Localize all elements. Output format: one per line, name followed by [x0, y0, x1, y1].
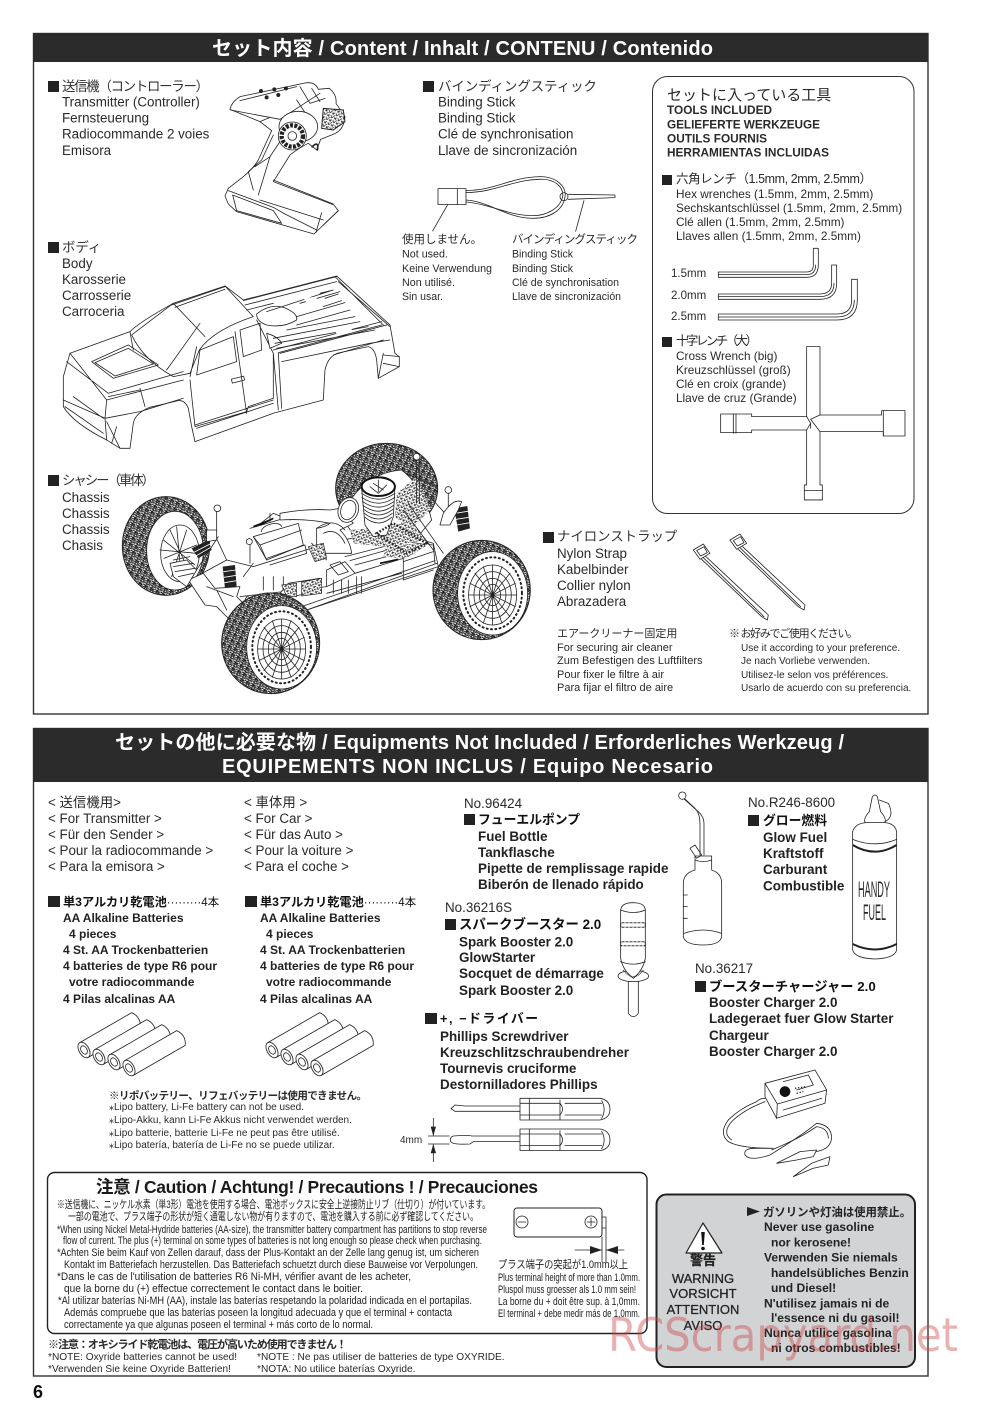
text block: warning labels: [667, 1253, 739, 1333]
text block: spark booster: No.36216S: [445, 900, 512, 915]
text block: transmitter: Transmitter (Controller): [62, 94, 200, 110]
panel: tools included: [652, 76, 914, 514]
panel: caution: [48, 1172, 647, 1334]
icon: hex wrench set: 1.5mm: [671, 268, 706, 280]
text block: body: Karosserie: [62, 272, 126, 287]
text block: warning message: l'essence ni du gasoil!: [771, 1311, 900, 1325]
text block: cross wrench: Clé en croix (grande): [676, 377, 786, 391]
text block: for transmitter: < For Transmitter >: [48, 811, 162, 826]
text block: glow fuel: No.R246-8600: [748, 795, 835, 810]
text block: for car: [244, 795, 354, 874]
text block: hex wrenches: Clé allen (1.5mm, 2mm, 2.5mm): [676, 215, 845, 229]
text block: booster charger: ブースターチャージャー 2.0: [709, 978, 876, 994]
text block: not used label: [402, 232, 492, 303]
icon: screwdrivers: [428, 1098, 610, 1162]
text block: AA batteries transmitter: 4 pieces: [69, 927, 117, 941]
wheel: front: [222, 593, 320, 694]
heading bar: equipment not included: セットの他に必要な物 / Equipments Not Included / Erforderliches Werkzeug /: [115, 731, 844, 754]
text block: screwdriver: Kreuzschlitzschraubendreher: [440, 1045, 630, 1060]
icon: hex wrench set: [671, 248, 857, 323]
heading: caution: 注意 / Caution / Achtung! / Precautions ! / Precauciones: [96, 1177, 538, 1197]
icon: booster charger: [723, 1070, 832, 1177]
icon: warning triangle: [686, 1223, 722, 1253]
text block: terminal note: La borne du + doit être sup. à 1,0mm.: [498, 1296, 640, 1308]
text block: lipo warning: ⁎Lipo-Akku, kann Li-Fe Akkus nicht verwendet werden.: [109, 1115, 352, 1126]
icon: batteries right: [263, 1011, 376, 1078]
text block: spark booster: GlowStarter: [459, 950, 536, 965]
engine: [350, 477, 430, 553]
text block: booster charger: Booster Charger 2.0: [709, 1044, 837, 1059]
panel: set contents: [33, 33, 928, 714]
text block: warning message: und Diesel!: [771, 1281, 836, 1295]
heading bar: equipment not included: [33, 728, 928, 782]
text block: fuel bottle: Tankflasche: [478, 845, 555, 860]
icon: binding stick: [433, 177, 615, 231]
text block: nylon strap: Collier nylon: [557, 578, 631, 593]
text block: glow fuel: Kraftstoff: [763, 846, 824, 861]
text block: glow fuel: [748, 795, 845, 894]
text block: AA batteries transmitter: 4 batteries de type R6 pour: [63, 959, 217, 973]
text block: nylon strap: Abrazadera: [557, 594, 627, 609]
wheel: rear left: [122, 497, 210, 595]
text block: preference note: ※ お好みでご使用ください。: [729, 626, 858, 640]
text block: AA batteries transmitter: votre radiocommande: [69, 975, 195, 989]
text block: caution body: flow of current. The plus (+) terminal on some types of batteries is not long enough so please check when purchasing.: [63, 1235, 482, 1247]
text block: binding stick: Llave de sincronización: [438, 143, 577, 158]
wheel: right: [433, 540, 530, 640]
text block: caution body: *Achten Sie beim Kauf von Zellen darauf, dass der Plus-Kontakt an der Zelle lang genug ist, um sicheren: [57, 1247, 479, 1259]
text block: hex wrenches: 六角レンチ（1.5mm, 2mm, 2.5mm）: [676, 172, 872, 186]
text block: AA batteries transmitter: [48, 894, 220, 1006]
heading bar: set contents: [33, 33, 928, 62]
text block: terminal note: Pluspol muss groesser als 1.0 mm sein!: [498, 1284, 636, 1296]
text block: AA batteries transmitter: 4 Pilas alcalinas AA: [63, 992, 176, 1006]
text block: air cleaner note: For securing air cleaner: [557, 642, 673, 654]
text block: not used label: 使用しません。: [402, 232, 482, 246]
text block: fuel bottle: Biberón de llenado rápido: [478, 877, 644, 892]
text block: for car: < Für das Auto >: [244, 827, 343, 842]
heading: tools included: TOOLS INCLUDED: [667, 103, 772, 117]
text block: terminal note: Plus terminal height of more than 1.0mm.: [498, 1272, 640, 1284]
text block: binding stick label: [512, 232, 638, 303]
icon: fuel can: FUEL: [863, 900, 886, 925]
text block: warning message: handelsübliches Benzin: [771, 1266, 909, 1280]
watermark: RCScrapyard.net: [608, 1308, 958, 1362]
text block: oxyride note: *NOTE : Ne pas utiliser de batteries de type OXYRIDE.: [257, 1352, 505, 1363]
text block: binding stick label: Binding Stick: [512, 248, 573, 260]
text block: glow fuel: Carburant: [763, 862, 828, 877]
heading bar: set contents: セット内容 / Content / Inhalt / CONTENU / Contenido: [212, 37, 713, 60]
text block: oxyride note: ※注意：オキシライド乾電池は、電圧が高いため使用できません！: [48, 1337, 347, 1351]
text block: booster charger: Booster Charger 2.0: [709, 995, 837, 1010]
text block: lipo warning: ⁎Lipo battery, Li-Fe battery can not be used.: [109, 1102, 304, 1113]
text block: screwdriver: +, −ドライバー: [440, 1011, 538, 1026]
icon: batteries left: [75, 1011, 188, 1078]
text block: spark booster: Spark Booster 2.0: [459, 983, 573, 998]
text block: nylon strap: ナイロンストラップ: [557, 529, 678, 544]
text block: nylon strap: Kabelbinder: [557, 562, 629, 577]
text block: spark booster: [445, 900, 604, 998]
text block: transmitter: 送信機（コントローラー）: [62, 79, 209, 94]
text block: binding stick label: バインディングスティック: [512, 232, 638, 246]
text block: caution body: 一部の電池で、プラス端子の形状が短く通電しない物が有りますので、電池を購入する前に必ず確認してください。: [68, 1209, 478, 1223]
text block: oxyride note: [48, 1337, 505, 1375]
icon: hex wrench set: 2.5mm: [671, 311, 706, 323]
text block: AA batteries car: 4 pieces: [266, 927, 314, 941]
text block: fuel bottle: [464, 796, 669, 892]
text block: warning labels: ATTENTION: [667, 1302, 739, 1317]
text block: body: Carrosserie: [62, 288, 131, 303]
text block: fuel bottle: Fuel Bottle: [478, 829, 548, 844]
text block: for transmitter: [48, 795, 213, 874]
text block: AA batteries car: 4 batteries de type R6 pour: [260, 959, 414, 973]
text block: AA batteries transmitter: AA Alkaline Batteries: [63, 911, 184, 925]
text block: booster charger: No.36217: [695, 961, 753, 976]
page number: 6: [33, 1382, 43, 1402]
text block: lipo warning: [109, 1089, 367, 1151]
text block: not used label: Sin usar.: [402, 291, 443, 303]
text block: caution body: *Al utilizar baterías Ni-MH (AA), instale las baterías respetando la polaridad indicada en el portapilas.: [58, 1295, 472, 1307]
text block: hex wrenches: [662, 172, 902, 243]
text block: cross wrench: Kreuzschlüssel (groß): [676, 363, 791, 377]
text block: binding stick: [423, 78, 597, 158]
text block: hex wrenches: Sechskantschlüssel (1.5mm, 2mm, 2.5mm): [676, 201, 902, 215]
icon: hex wrench set: 2.0mm: [671, 290, 706, 302]
text block: caution body: *When using Nickel Metal-Hydride batteries (AA-size), the transmitter battery compartment has partitions to stop reverse: [57, 1224, 487, 1236]
heading: tools included: GELIEFERTE WERKZEUGE: [667, 118, 820, 132]
text block: warning message: Verwenden Sie niemals: [764, 1250, 898, 1264]
text block: warning message: nor kerosene!: [771, 1236, 851, 1250]
text block: caution body: [57, 1197, 490, 1331]
air cleaner: [280, 495, 362, 562]
text block: preference note: [729, 626, 911, 694]
text block: body: Body: [62, 256, 93, 271]
text block: chassis: [48, 473, 155, 553]
text block: glow fuel: Combustible: [763, 878, 845, 894]
text block: chassis: Chassis: [62, 522, 110, 537]
chassis frame: [190, 530, 438, 610]
text block: glow fuel: グロー燃料: [763, 813, 827, 828]
text block: AA batteries car: 4 St. AA Trockenbatterien: [260, 943, 405, 957]
text block: chassis: Chasis: [62, 538, 103, 553]
text block: binding stick: Clé de synchronisation: [438, 126, 573, 142]
text block: air cleaner note: Para fijar el filtro de aire: [557, 682, 673, 694]
text block: spark booster: スパークブースター 2.0: [459, 916, 601, 932]
text block: warning labels: VORSICHT: [669, 1286, 737, 1301]
icon: nylon straps: [693, 534, 805, 620]
text block: warning labels: AVISO: [684, 1318, 722, 1333]
text block: for car: < Para el coche >: [244, 859, 349, 874]
suspension: [170, 453, 470, 620]
text block: screwdriver: Destornilladores Phillips: [440, 1077, 598, 1092]
arrow: [747, 1207, 760, 1216]
text block: transmitter: Radiocommande 2 voies: [62, 126, 210, 142]
icon: battery terminal diagram: [514, 1208, 624, 1262]
icon: fuel bottle: [679, 792, 722, 945]
text block: binding stick: バインディングスティック: [438, 78, 597, 94]
text block: spark booster: Spark Booster 2.0: [459, 934, 573, 950]
icon: transmitter controller: [225, 83, 345, 234]
text block: hex wrenches: Llaves allen (1.5mm, 2mm, 2.5mm): [676, 229, 861, 243]
text block: booster charger: Ladegeraet fuer Glow Starter: [709, 1011, 894, 1026]
icon: fuel can: [853, 795, 897, 959]
text block: for transmitter: < 送信機用>: [48, 795, 121, 810]
text block: for car: < For Car >: [244, 811, 313, 826]
text block: for transmitter: < Für den Sender >: [48, 827, 164, 842]
text block: chassis: シャシー（車体）: [62, 473, 155, 488]
text block: AA batteries car: 4 Pilas alcalinas AA: [260, 992, 373, 1006]
text block: warning message: Nunca utilice gasolina: [764, 1326, 892, 1340]
text block: glow fuel: Glow Fuel: [763, 830, 827, 845]
text block: chassis: Chassis: [62, 506, 110, 521]
text block: oxyride note: *NOTE: Oxyride batteries cannot be used!: [48, 1352, 237, 1363]
text block: warning labels: 警告: [690, 1253, 716, 1268]
text block: caution body: Kontakt im Batteriefach herzustellen. Das Batteriefach schuetzt durch diese Bauweise vor Verpolungen.: [64, 1259, 478, 1271]
text block: caution body: *Dans le cas de l'utilisation de batteries R6 Ni-MH, vérifier avant de les acheter,: [57, 1271, 411, 1283]
text block: preference note: Usarlo de acuerdo con su preferencia.: [741, 683, 911, 694]
icon: cross wrench: [721, 347, 905, 500]
text block: cross wrench: Cross Wrench (big): [676, 349, 777, 363]
text block: not used label: Keine Verwendung: [402, 263, 492, 275]
text block: caution body: ※送信機に、ニッケル水素（単3形）電池を使用する場合、電池ボックスに安全上逆接防止リブ（仕切り）が付いています。: [57, 1197, 490, 1211]
text block: air cleaner note: エアークリーナー固定用: [557, 627, 677, 640]
text block: AA batteries car: votre radiocommande: [266, 975, 392, 989]
text block: for car: < Pour la voiture >: [244, 843, 354, 858]
text block: screwdriver: [425, 1011, 630, 1092]
label: 4mm: 4mm: [400, 1135, 422, 1146]
text block: caution body: Además compruebe que las baterías poseen la longitud adecuada y que el terminal + contacta: [64, 1307, 453, 1319]
text block: warning labels: WARNING: [672, 1271, 734, 1286]
text block: cross wrench: Llave de cruz (Grande): [676, 391, 797, 405]
text block: terminal note: プラス端子の突起が1.0mm以上: [498, 1257, 628, 1271]
text block: warning message: ni otros combustibles!: [771, 1341, 901, 1355]
text block: transmitter: Emisora: [62, 143, 112, 158]
text block: preference note: Utilisez-le selon vos préférences.: [741, 670, 888, 681]
text block: lipo warning: ⁎Lipo batería, batería de Li-Fe no se puede utilizar.: [109, 1140, 335, 1151]
text block: binding stick label: Clé de synchronisation: [512, 277, 619, 289]
heading: tools included: HERRAMIENTAS INCLUIDAS: [667, 146, 829, 160]
text block: air cleaner note: Pour fixer le filtre à air: [557, 669, 664, 681]
text block: cross wrench: [662, 334, 797, 405]
text block: for transmitter: < Para la emisora >: [48, 859, 165, 874]
text block: screwdriver: Tournevis cruciforme: [440, 1061, 577, 1076]
text block: hex wrenches: Hex wrenches (1.5mm, 2mm, 2.5mm): [676, 187, 873, 201]
icon: spark booster: [618, 903, 649, 1017]
text block: binding stick: Binding Stick: [438, 94, 516, 110]
text block: caution body: correctamente ya que algunas poseen el terminal + más corto de lo normal.: [64, 1319, 373, 1331]
text block: oxyride note: *NOTA: No utilice baterías Oxyride.: [257, 1364, 416, 1375]
text block: oxyride note: *Verwenden Sie keine Oxyride Batterien!: [48, 1364, 231, 1375]
text block: body: [48, 239, 131, 319]
text block: body: Carroceria: [62, 304, 125, 319]
panel: equipment not included: [33, 728, 928, 1376]
radio box: [250, 513, 307, 565]
text block: AA batteries car: 単3アルカリ乾電池·········4本: [260, 894, 417, 909]
text block: spark booster: Socquet de démarrage: [459, 966, 604, 981]
text block: nylon strap: [543, 529, 678, 609]
text block: chassis: Chassis: [62, 490, 110, 505]
icon: truck body: [63, 276, 399, 448]
text block: preference note: Je nach Vorliebe verwenden.: [741, 656, 870, 667]
text block: screwdriver: Phillips Screwdriver: [440, 1029, 569, 1044]
text block: not used label: Not used.: [402, 248, 448, 260]
text block: booster charger: [695, 961, 894, 1059]
text block: AA batteries transmitter: 4 St. AA Trockenbatterien: [63, 943, 208, 957]
text block: AA batteries car: [245, 894, 417, 1006]
text block: transmitter: Fernsteuerung: [62, 110, 149, 126]
wheel: rear top: [336, 443, 438, 550]
text block: fuel bottle: Pipette de remplissage rapide: [478, 861, 669, 876]
text block: fuel bottle: フューエルポンプ: [478, 812, 580, 827]
text block: terminal note: El terminal + debe medir más de 1,0mm.: [498, 1308, 640, 1320]
text block: nylon strap: Nylon Strap: [557, 546, 627, 561]
text block: air cleaner note: Zum Befestigen des Luftfilters: [557, 655, 703, 667]
text block: warning message: ガソリンや灯油は使用禁止。: [763, 1205, 911, 1219]
icon: chassis: [122, 443, 530, 694]
panel: warning: [656, 1194, 915, 1367]
text block: booster charger: Chargeur: [709, 1028, 770, 1043]
text block: transmitter: [48, 79, 210, 158]
text block: for car: < 車体用 >: [244, 795, 307, 810]
text block: not used label: Non utilisé.: [402, 277, 455, 289]
heading: tools included: [667, 87, 831, 160]
text block: AA batteries transmitter: 単3アルカリ乾電池·········4本: [63, 894, 220, 909]
text block: warning message: N'utilisez jamais ni de: [764, 1296, 889, 1310]
heading bar: equipment not included: EQUIPEMENTS NON INCLUS / Equipo Necesario: [222, 756, 713, 778]
text block: body: ボディ: [62, 239, 101, 255]
text block: warning message: Never use gasoline: [764, 1220, 875, 1234]
icon: fuel can: HANDY: [858, 877, 890, 902]
text block: warning message: [763, 1205, 911, 1355]
text block: AA batteries car: AA Alkaline Batteries: [260, 911, 381, 925]
heading: tools included: OUTILS FOURNIS: [667, 132, 767, 146]
text block: cross wrench: 十字レンチ（大）: [676, 334, 758, 348]
text block: lipo warning: ※リポバッテリー、リフェバッテリーは使用できません。: [109, 1089, 367, 1102]
text block: air cleaner note: [557, 627, 703, 694]
text block: binding stick label: Llave de sincronización: [512, 291, 621, 303]
text block: lipo warning: ⁎Lipo batterie, batterie Li-Fe ne peut pas être utilisé.: [109, 1128, 340, 1139]
text block: terminal note: [498, 1257, 640, 1320]
text block: for transmitter: < Pour la radiocommande >: [48, 843, 213, 858]
text block: caution body: que la borne du (+) effectue correctement le contact dans le boitier.: [64, 1283, 363, 1295]
text block: fuel bottle: No.96424: [464, 796, 523, 811]
text block: preference note: Use it according to your preference.: [741, 643, 900, 654]
text block: binding stick label: Binding Stick: [512, 263, 573, 275]
heading: tools included: セットに入っている工具: [667, 87, 831, 104]
text block: binding stick: Binding Stick: [438, 110, 516, 126]
